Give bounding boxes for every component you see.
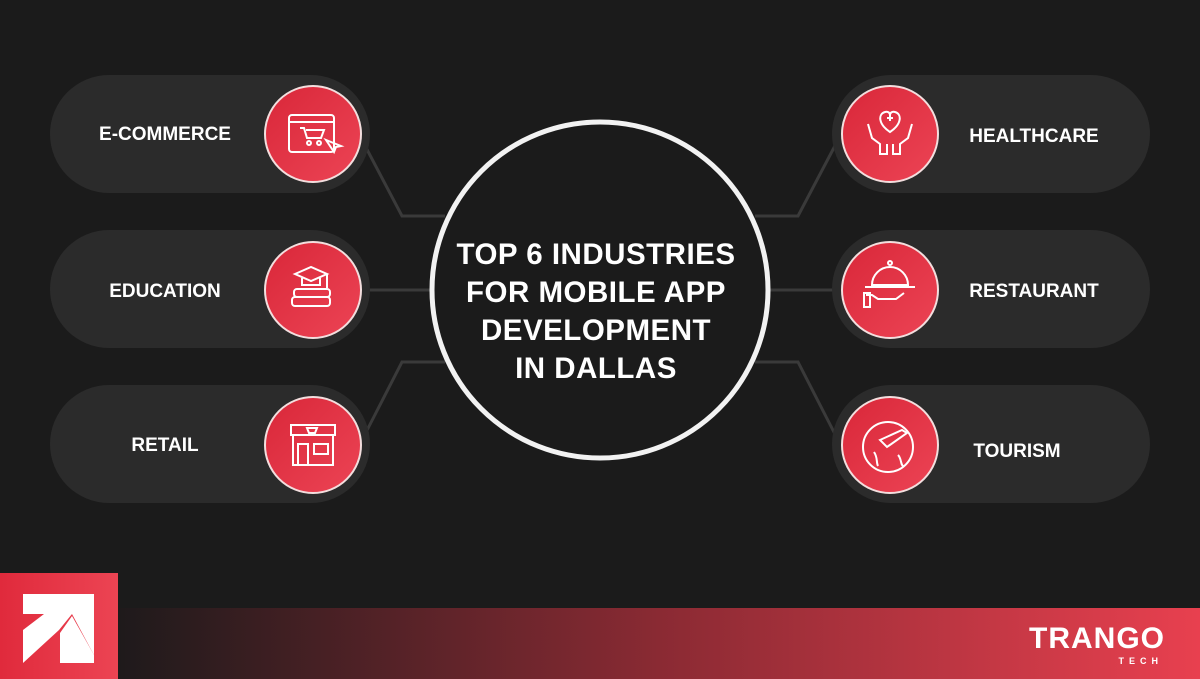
title: IN DALLAS bbox=[515, 352, 677, 385]
title: FOR MOBILE APP bbox=[466, 276, 726, 309]
panel: restaurant bbox=[832, 230, 1150, 348]
brand logo: TECH bbox=[1118, 656, 1163, 666]
logo square with arrow bbox=[0, 573, 118, 679]
panel: restaurant: RESTAURANT bbox=[969, 281, 1099, 302]
title: TOP 6 INDUSTRIES bbox=[456, 238, 736, 271]
icon: heart in hands bbox=[842, 86, 938, 182]
brand logo: TRANGO bbox=[1029, 622, 1165, 655]
panel: retail bbox=[50, 385, 370, 503]
icon: cloche bbox=[842, 242, 938, 338]
connector lines bbox=[362, 140, 838, 440]
panel: healthcare bbox=[832, 75, 1150, 193]
panel: healthcare: HEALTHCARE bbox=[969, 126, 1099, 147]
panel: e-commerce: E-COMMERCE bbox=[99, 124, 231, 145]
central title circle bbox=[432, 122, 768, 458]
icon: store bbox=[265, 397, 361, 493]
panel: tourism bbox=[832, 385, 1150, 503]
icon: graduation books bbox=[265, 242, 361, 338]
panel: education bbox=[50, 230, 370, 348]
icon: globe plane bbox=[842, 397, 938, 493]
panel: tourism: TOURISM bbox=[973, 441, 1061, 462]
panel: retail: RETAIL bbox=[131, 435, 199, 456]
panel: education: EDUCATION bbox=[109, 281, 221, 302]
panel: e-commerce bbox=[50, 75, 370, 193]
footer bar bbox=[118, 608, 1200, 679]
icon: shopping cart bbox=[265, 86, 361, 182]
title: DEVELOPMENT bbox=[481, 314, 711, 347]
